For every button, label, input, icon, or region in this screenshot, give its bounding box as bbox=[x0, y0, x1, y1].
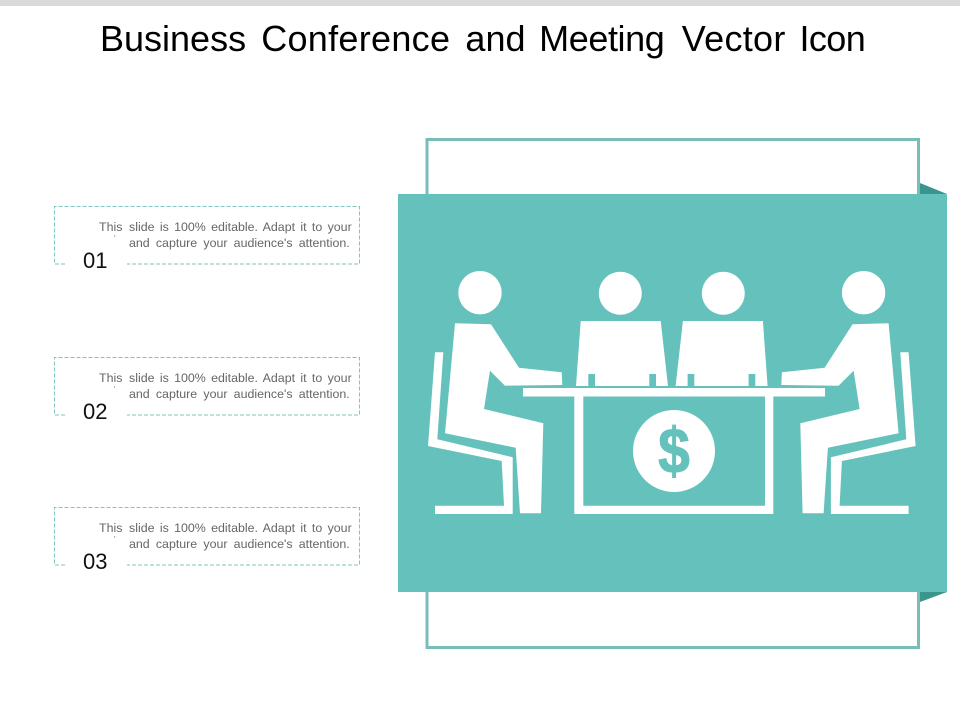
item 02: 02 bbox=[83, 399, 107, 424]
item 02 bbox=[54, 358, 360, 424]
icon: dollar coin: $ bbox=[658, 414, 690, 486]
fold: top right bbox=[920, 183, 947, 194]
icon: business meeting bbox=[428, 271, 916, 514]
item 02: slide is 100% editable. Adapt it to your bbox=[129, 371, 352, 385]
person: far left bbox=[428, 271, 562, 514]
item 02: ' bbox=[114, 385, 116, 394]
item 03: ' bbox=[114, 535, 116, 544]
person: centre left bbox=[576, 272, 668, 386]
item 01: slide is 100% editable. Adapt it to your bbox=[129, 220, 352, 234]
item 01: and capture your audience's attention. bbox=[129, 236, 350, 250]
person: far right bbox=[781, 271, 916, 514]
item 01: This bbox=[99, 220, 122, 234]
item 02: and capture your audience's attention. bbox=[129, 387, 350, 401]
back frame bbox=[427, 140, 918, 648]
item 01 bbox=[54, 206, 360, 273]
item 03: 03 bbox=[83, 549, 107, 574]
item 02: This bbox=[99, 371, 122, 385]
table bbox=[523, 388, 825, 514]
teal panel bbox=[398, 194, 947, 592]
item 01: ' bbox=[114, 234, 116, 243]
title: Business Conference and Meeting Vector Icon bbox=[100, 18, 865, 59]
item 01: 01 bbox=[83, 248, 107, 273]
item 03: slide is 100% editable. Adapt it to your bbox=[129, 521, 352, 535]
item 03 bbox=[54, 508, 360, 574]
item 03: and capture your audience's attention. bbox=[129, 537, 350, 551]
fold: bottom right bbox=[920, 592, 947, 602]
item 03: This bbox=[99, 521, 122, 535]
person: centre right bbox=[676, 272, 768, 386]
icon: dollar coin bbox=[633, 410, 715, 492]
